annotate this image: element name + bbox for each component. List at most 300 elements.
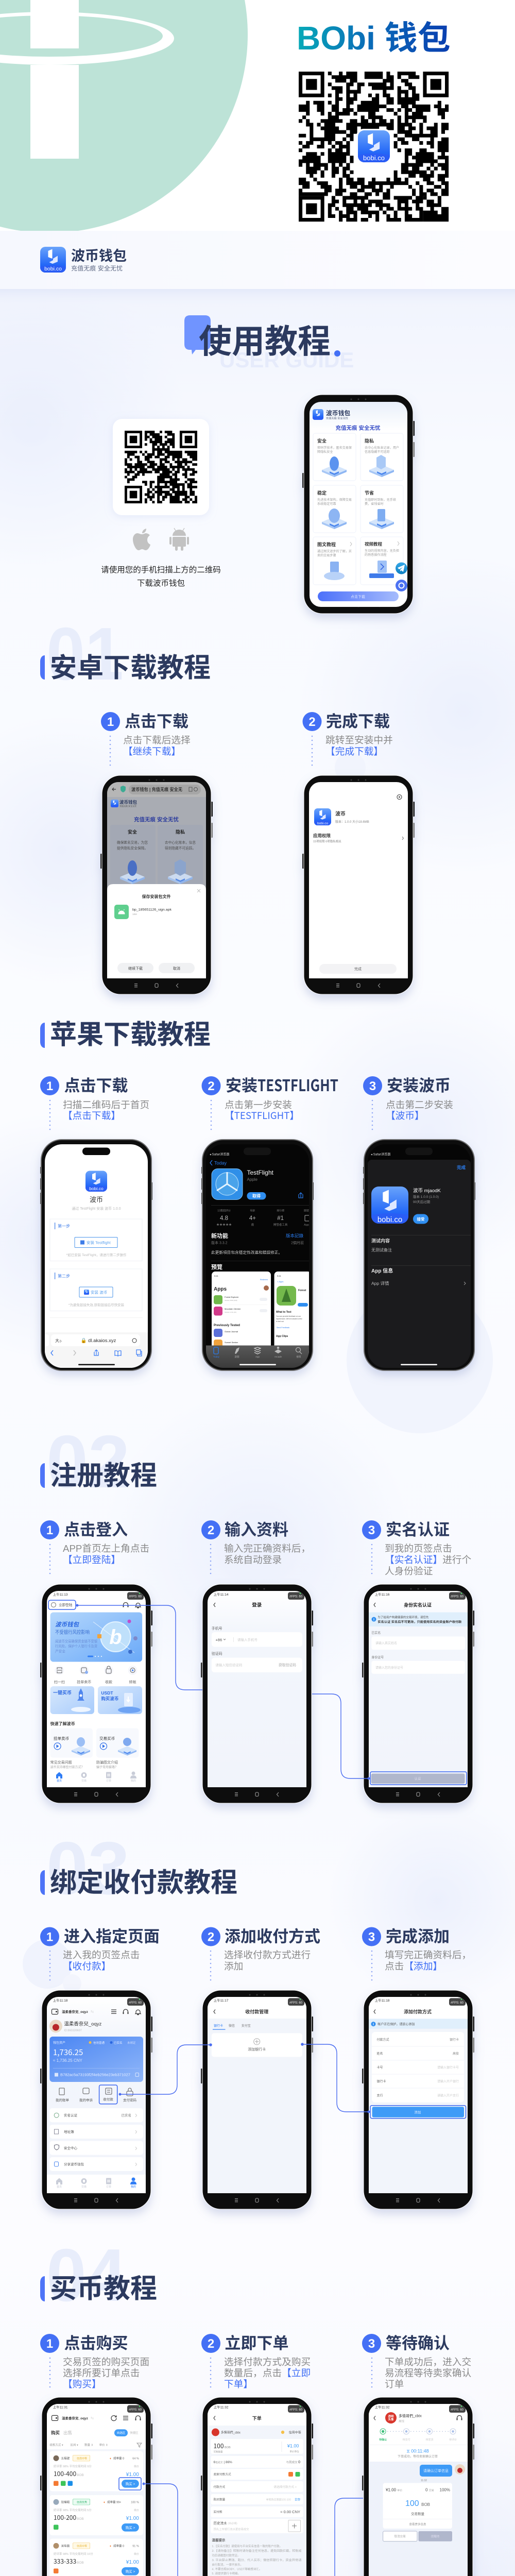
phone: add payment method: #FPS: 60 [451,2002,464,2005]
progress steps [369,2429,468,2445]
phone: app home login: 防骗图文介绍 [96,1760,118,1765]
main QR code [299,72,449,222]
order card 3: 好评率 98% 平均交易时间 10分 [54,2552,93,2556]
register step 1: 【立即登陆】 [63,1554,121,1565]
form: 银行卡 [450,2038,459,2042]
step card 2 [50,1269,142,1311]
phone: buy list: 收款方式 ▾ [49,2443,63,2447]
phone: place order: 信用中等 [289,2431,301,2435]
user: ID:860339697 [64,2029,82,2032]
order card 3: 91 % [132,2545,139,2548]
preview screenshot 2: You can provide feedback on our [276,1315,301,1317]
form: 姓名 [377,2052,383,2056]
phone: iOS accept invite [363,1140,475,1370]
tab bar: 首页 [57,2185,62,2189]
register step 3: 人身份验证 [385,1566,433,1577]
card: 视频教程: 生动的视频内容，无负担 [365,549,399,553]
section 03: bind payment heading [40,1826,237,1910]
phone: place order: ≈ 0.00 CNY [280,2510,300,2514]
order card 1: 好评率 98% 平均交易时间 9分 [54,2464,92,2468]
card: 稳定 [313,485,356,533]
phone: wait for confirmation: 取消交易 [394,2534,406,2538]
phone: android save package: 波币钱包 | 充值无痕 安全无 [131,786,182,792]
order card 3: 米味茵 [61,2544,70,2548]
apple step 1 [40,1076,149,1130]
buy step 1: 1 [46,2337,53,2351]
phone: login form: 登录 [252,1602,262,1608]
apple step 2: 点击第一步安装 [225,1099,292,1110]
wallet card: 钱包资产 [53,2041,65,2045]
card: 安全: 安全 [317,438,327,444]
android step 1: 点击下载 [125,713,188,731]
main heading: 使用教程 [184,315,354,372]
bottom sheet [107,884,206,978]
phone: android save package: 隐私 [176,829,185,835]
buy step 2: 选择付款方式及购买 [224,2357,311,2367]
register step 2: 2 [208,1523,214,1537]
phone: login form: 手机号 [212,1626,222,1631]
phone: place order: 上午11:32 [214,2405,229,2409]
tab bar: App [255,1355,260,1358]
apple step 1: 【点击下载】 [63,1110,121,1121]
download button [318,591,399,601]
order card 1: BOB [77,2473,84,2477]
section 02: register heading: 注册教程 [50,1461,157,1491]
tips: 3. 平台禁止黑钱、跑分、代人买币；微信转银行卡，资金异常请 [212,2558,302,2562]
icon: apple [133,529,150,550]
section 03: bind payment heading: 绑定收付款教程 [50,1868,237,1898]
preview screenshot 1: Mountain Climber [225,1308,241,1310]
phone: buy list: #FPS: 60 [129,2409,142,2412]
phone: iOS TestFlight page: 版本 3.3.2 [211,1241,228,1245]
settings rows [49,2108,143,2171]
phone: app home login [40,1584,152,1803]
register connectors and highlights [48,1600,467,1785]
form: 卡号 [377,2065,383,2070]
QR card [113,419,209,515]
card: 安全: 障隐私安全 [317,450,333,454]
phone: place order: 100 [213,2442,224,2450]
phone: iOS install page: 通过 TestFlight 安装 波币 1.0.0 [72,1206,121,1211]
buy connectors and highlights [119,2478,363,2576]
phone: android install done: 应用权限 [313,833,331,838]
phone: app home login: #FPS: 60 [129,1595,142,1598]
phone: iOS TestFlight page: 4.8 [220,1215,228,1222]
phone: payment management: 微信 [229,2024,235,2028]
phone: payment management [201,1990,313,2209]
card: 隐私 [360,433,403,481]
banner: 产安全 [55,1649,65,1654]
browser bar [43,1332,148,1368]
phone: place order: 实付款 [213,2510,222,2514]
order card 1: 100-400 [54,2469,76,2478]
phone: app home login: 骗子常用套路？ [96,1765,118,1769]
phone: login form: 上午11:14 [214,1592,229,1597]
phone: buy list: 上午11:31 [53,2405,68,2409]
settings rows: 已实名 [122,2113,131,2117]
phone: place order: 预先上传银行流水更容易成交 [213,2527,249,2531]
phone: iOS accept invite: 测试内容 [371,1238,390,1244]
phone: iOS TestFlight page: 10萬個評分 [217,1209,231,1213]
phone: android save package: 提供隐私安全保障。 [117,846,148,850]
order card 3: ¥1.00 [126,2560,139,2565]
phone: payment management: 上午11:17 [214,1998,229,2003]
phone: iOS TestFlight page: 預覽 [211,1263,222,1270]
android step 2 [303,712,393,767]
register step 2: 输入完正确资料后， [224,1543,311,1554]
phone: identity verification: 上午11:16 [375,1592,390,1597]
phone: login form: +86 [215,1637,222,1642]
buy step 3: 下单成功后，进入交 [385,2357,471,2367]
step card 2: *为避免链接失效,获取链接后尽快安装 [68,1302,125,1307]
section 02: register heading: 02 [46,1420,130,1503]
register step 1: 1 [46,1523,53,1537]
phone: place order: 可售数量 [213,2450,223,2453]
card: 节省: 节省 [365,490,374,496]
tips: 功后请截图付款凭证。 [212,2553,240,2557]
order card 1: 成单量 0 [113,2456,124,2461]
phone: place order: 6笔成交 | 86% [213,2461,232,2464]
profile shortcuts: 我的申诉 [79,2098,93,2102]
card: 隐私: 隐私 [365,438,374,444]
buy step 1: 点击购买 [64,2334,128,2352]
banner: b [109,1626,122,1649]
android step 1: 【继续下载】 [123,746,181,757]
order card 1: 64 % [132,2458,139,2461]
shortcut icons: 收款 [105,1680,112,1684]
banner: 波币钱包 [55,1621,79,1628]
phone: add payment method [362,1990,474,2209]
phone: profile page: 温柔香奈兒_oqyz [62,2009,89,2014]
order card 3: 购买 > [126,2569,135,2574]
card: 稳定: 系统稳定可靠 [317,502,336,506]
scan instruction [101,565,221,588]
order card 3: 成单量 0 [113,2544,124,2548]
phone: wait for confirmation: 多情哥們_cbtx [399,2413,422,2418]
phone: app home login: 快速了解波币 [50,1721,75,1726]
order card 2: 信用优秀 [77,2501,87,2504]
order card 1: 信用中等 [77,2456,87,2461]
preview screenshot 2: 9:41 [277,1275,282,1277]
preview screenshot 1: Forest Explorer [225,1296,239,1298]
section 04: buy heading: 04 [46,2233,126,2317]
phone: buy list: 出售 [63,2430,72,2435]
phone: iOS TestFlight page: Apple [247,1177,258,1182]
card: 隐私: 信息隐藏不可追踪 [365,450,390,454]
shortcut icons: 扫一扫 [54,1680,65,1684]
card: 节省: 充值即时到账，无手续 [365,498,396,502]
order card 1: 单价 [134,2465,139,2468]
bind step 3: 完成添加 [386,1928,450,1945]
support button [396,580,407,591]
phone: payment management: 银行卡 [214,2024,223,2028]
apple step 1: 点击下载 [64,1077,128,1095]
preview screenshot 2: experiences. We've included a few [276,1318,302,1320]
phone: place order: ¥1.00 [287,2443,299,2448]
bind step 1: 进入指定页面 [64,1928,160,1945]
card: 图文教程 [313,537,356,585]
phone: iOS accept invite: 90天后过期 [413,1199,431,1204]
phone: iOS TestFlight page: TestFlight [247,1169,274,1176]
buy step 3: 等待确认 [386,2334,450,2352]
apple step 1: 1 [46,1079,53,1093]
preview screenshot 1: 9:41 [214,1275,219,1277]
phone: app home login: 波币支持哪些付款方式？ [50,1765,84,1769]
order card 3: 333-333 [54,2557,76,2566]
register step 2: 系统自动登录 [224,1554,282,1565]
order summary card: 100% [440,2487,450,2493]
preview screenshot 1 [212,1272,271,1346]
tab bar: 我的 [131,1779,136,1783]
section: apple heading: 苹果下载教程 [50,1020,211,1050]
order card 2: 购买 > [126,2526,135,2530]
user: 温柔香奈兒_oqyz [64,2021,102,2027]
section 03: bind payment heading: 03 [46,1826,130,1910]
phone: iOS TestFlight page: 版本記錄 [286,1233,303,1239]
order card 1 [49,2451,143,2492]
phone: buy list: 快捷区 [130,2431,139,2435]
preview screenshot 1: Redeem [260,1278,268,1281]
phone: iOS accept invite: 波币 mjaodK [413,1188,441,1194]
promo cards: 购买波币 [101,1696,118,1701]
android step 1 [101,712,191,767]
phone: wait for confirmation: ⧖ 00:11:48 [406,2448,429,2453]
phone: add payment method: 添加付款方式 [404,2009,432,2014]
bottom sheet: bp_185651126_sign.apk [132,908,172,912]
tab bar: 交易 [81,1779,87,1783]
preview screenshot 1: Ocean Journal [225,1330,238,1333]
phone: iOS TestFlight page: Today [214,1160,227,1165]
phone: android save package: 安全 [128,829,137,835]
register step 2: 输入资料 [225,1521,288,1539]
android step 2: 完成下载 [326,713,390,731]
tab bar [206,1346,309,1368]
main heading: 使用教程: USER GUIDE [219,348,354,372]
tab bar: 交易 [81,2185,87,2189]
phone: identity verification: 实名认证 实名后不可更改，只能使用实名的资金账户收付款 [377,1620,462,1624]
banner [50,1613,142,1662]
phone: add payment method: 添加 [414,2110,421,2114]
register step 2 [201,1520,311,1574]
preview screenshot 1: Version 8.82 (240) [225,1299,237,1301]
phone: android install done: 版本：1.0.0 大小18.6MB [335,820,369,824]
form: 高俊 [453,2052,459,2056]
wallet card [49,2037,143,2082]
banner: 行风险，保护个人银行卡及资 [55,1644,97,1649]
phone: wait for confirmation: 11:32 [421,2479,427,2482]
wallet card: 信用普通 [93,2041,105,2045]
phone: iOS TestFlight page: ◂ Safari浏览器 [210,1152,229,1156]
phone: iOS accept invite: App 信息 [371,1267,393,1274]
phone: iOS TestFlight page [201,1140,314,1370]
brand band with logo: 充值无痕 安全无忧 [71,264,123,272]
browser bar: 大小 [55,1338,62,1343]
order summary card [383,2483,452,2529]
phone: iOS TestFlight page: 開發 [304,1209,309,1213]
bind step 2 [201,1927,320,1981]
bind step 3 [362,1927,471,1981]
order card 2: ¥1.00 [126,2516,139,2521]
phone: wait for confirmation: 提醒他 [431,2534,440,2538]
form: 支行 [377,2094,383,2098]
shortcut icons: 挂单卖币 [77,1680,91,1684]
settings rows: 分享波币钱包 [64,2162,84,2166]
phone: android save package: 确保匿名交易，为您 [117,840,148,845]
phone: android save package: 去中心化账本，信息 [165,840,196,845]
phone: android install done: 完成 [354,967,362,971]
phone: payment management: 添加银行卡 [248,2047,266,2052]
preview screenshot 1: Sunset Seeker [225,1341,238,1344]
phone: hero app home [302,395,415,614]
phone: android save package: 波币钱包 [119,800,138,805]
phone: login form: 请输入手机号 [237,1637,258,1642]
step card 1: *如已安装 TestFlight，请进行第二步操作 [66,1252,127,1257]
order card 3: BOB [77,2561,84,2565]
icon: android [169,528,189,551]
phone: iOS accept invite: App 详情 [371,1281,389,1286]
section 04: buy heading: 买币教程 [50,2274,157,2304]
bind step 1: 【收付款】 [63,1961,111,1972]
order card 2: 100 % [131,2501,139,2504]
card: 节省: 费，省钱省时 [365,502,384,506]
phone: wait for confirmation: 透明 [388,2414,394,2418]
tab bar: 首页 [57,1779,62,1783]
card: 视频教程 [360,537,403,585]
hero: tether emblem [0,0,248,233]
browser bar: 🔒 dl.akaios.xyz [81,1337,116,1344]
promo cards [50,1686,142,1714]
form: 请输入银行卡号 [437,2065,459,2070]
phone: identity verification [362,1584,474,1803]
phone: android save package: 充值无痕 安全无忧 [134,816,179,823]
preview screenshot 2: App Clips [276,1335,288,1338]
register step 3: 实名认证 [386,1521,450,1539]
android step 2: 2 [308,715,316,729]
order card 2: ♦ [104,2501,105,2504]
buy step 3: 订单 [385,2379,404,2389]
phone: buy list: 单价 ⇕ [99,2443,108,2447]
phone: iOS TestFlight page: 排行榜 [277,1209,284,1213]
phone: iOS TestFlight page: App [304,1224,309,1227]
bind step 2: 2 [208,1930,214,1944]
card: 稳定: 稳定 [317,490,327,496]
form: 付款方式 [377,2038,389,2042]
phone: login form: 请输入短信验证码 [215,1663,243,1667]
phone: place order [201,2397,313,2576]
bind step 3: 点击【添加】 [385,1961,442,1972]
card: 稳定: 先进技术架构，保障交易 [317,498,352,502]
bind step 1: 进入我的页签点击 [63,1950,140,1960]
phone: iOS accept invite: 无测试备注 [371,1247,392,1252]
phone: profile page [40,1990,152,2209]
phone: iOS TestFlight page: 年齡 [250,1209,255,1213]
phone: add payment method: 上午11:18 [375,1998,390,2003]
banner: 闻波币交易确保资金链不受银 [55,1639,97,1643]
phone: place order: 请选择付款方式 > [273,2485,297,2489]
phone: hero app home: 充值无痕 安全无忧 [326,416,348,420]
card: 视频教程: 视频教程 [365,541,383,547]
buy step 2: 立即下单 [225,2334,288,2352]
phone: iOS accept invite: 版本 1.0.0 (1.0.0) [413,1194,439,1199]
bind step 2: 添加 [224,1961,243,1972]
apple step 2: 【TESTFLIGHT】 [225,1108,299,1122]
bottom sheet: 取消 [173,966,180,971]
brand band with logo: bobi.co [44,266,62,272]
apple step 2: 2 [208,1079,215,1093]
phone: buy list [40,2397,152,2576]
phone: profile page: 上午11:18 [53,1998,68,2003]
progress steps: 待评价 [449,2438,457,2442]
buy step 2: 下单】 [224,2379,253,2389]
promo cards: USDT [101,1690,113,1696]
buy step 3: 3 [368,2337,375,2351]
phone: iOS accept invite: 接受 [417,1216,425,1222]
order summary card: 0 交易 [425,2487,434,2493]
settings rows: 地址簿 [64,2129,74,2134]
scan instruction: 下载波币钱包 [137,579,185,588]
telegram button [396,563,407,574]
android step 2: 【完成下载】 [325,746,383,757]
tab bar: Arcade [274,1355,282,1358]
phone: place order: 单价单位 [289,2450,299,2453]
tab bar: 订单 [106,1779,111,1783]
order card 2: 狂编辑 [61,2500,70,2504]
phone: iOS TestFlight page: 取得 [252,1193,261,1198]
phone: place order: 单笔购买限额100-100 [266,2498,291,2502]
tips: 自行取消，一律不放币。 [212,2563,243,2567]
wallet card: 未绑定 [127,2041,136,2045]
android step 1: 1 [107,715,114,729]
register step 3: 【实名认证】进行个 [385,1554,472,1565]
card: 图文教程: 卖的交易步骤 [317,553,336,557]
phone: iOS accept invite: bobi.co [377,1215,402,1224]
card: 安全 [313,433,356,481]
main heading: 使用教程: 使用教程 [199,323,331,360]
preview screenshot 2: Forest [298,1289,306,1292]
phone: iOS accept invite: ◂ Safari浏览器 [371,1152,390,1156]
form: 请输入开户银行 [437,2079,459,2083]
card: 隐私: 去中心化账本记录，用户 [365,446,399,450]
tips: 4. 不要出现BOBY、USDT等敏感词汇。 [212,2567,262,2571]
order card 2: BOB [77,2517,84,2521]
tab bar [47,1769,146,1787]
settings rows: 安全中心 [64,2145,77,2150]
phone: iOS TestFlight page: 歲 [251,1223,254,1227]
phone: iOS install page: bobi.co [89,1186,104,1191]
phone: wait for confirmation: 下单成功，等待卖家确认订单 [398,2454,438,2459]
order card 1: ♦ [110,2458,111,2461]
bottom sheet: 18M [132,913,137,916]
learn cards: 挂单卖币 [54,1736,69,1741]
wallet card: 已实名 [114,2041,123,2045]
phone: iOS TestFlight page: 2個月前 [291,1241,304,1245]
order card 3: 单价 [134,2552,139,2556]
phone: wait for confirmation: 上午11:32 [375,2405,390,2409]
order card 3 [49,2539,143,2576]
buy step 2: 数量后，点击【立即 [224,2368,311,2378]
phone: android install done: 波币 [335,810,346,817]
order summary card: 100 BOB [405,2499,430,2508]
phone: login form [201,1584,313,1803]
phone: login form: 验证码 [212,1651,222,1656]
card: 安全: 密码学技术，匿名交易保 [317,446,352,450]
phone: buy list: 数量 ⇕ [84,2443,93,2447]
phone: identity verification: 认证 [414,1776,421,1781]
phone: place order: 多情哥們_cbtx [221,2431,241,2435]
order card 1: ¥1.00 [126,2472,139,2478]
phone: wait for confirmation: 离线 [399,2419,405,2424]
order card 2: 好评率 98% 平均交易时间 5分 [54,2508,92,2512]
